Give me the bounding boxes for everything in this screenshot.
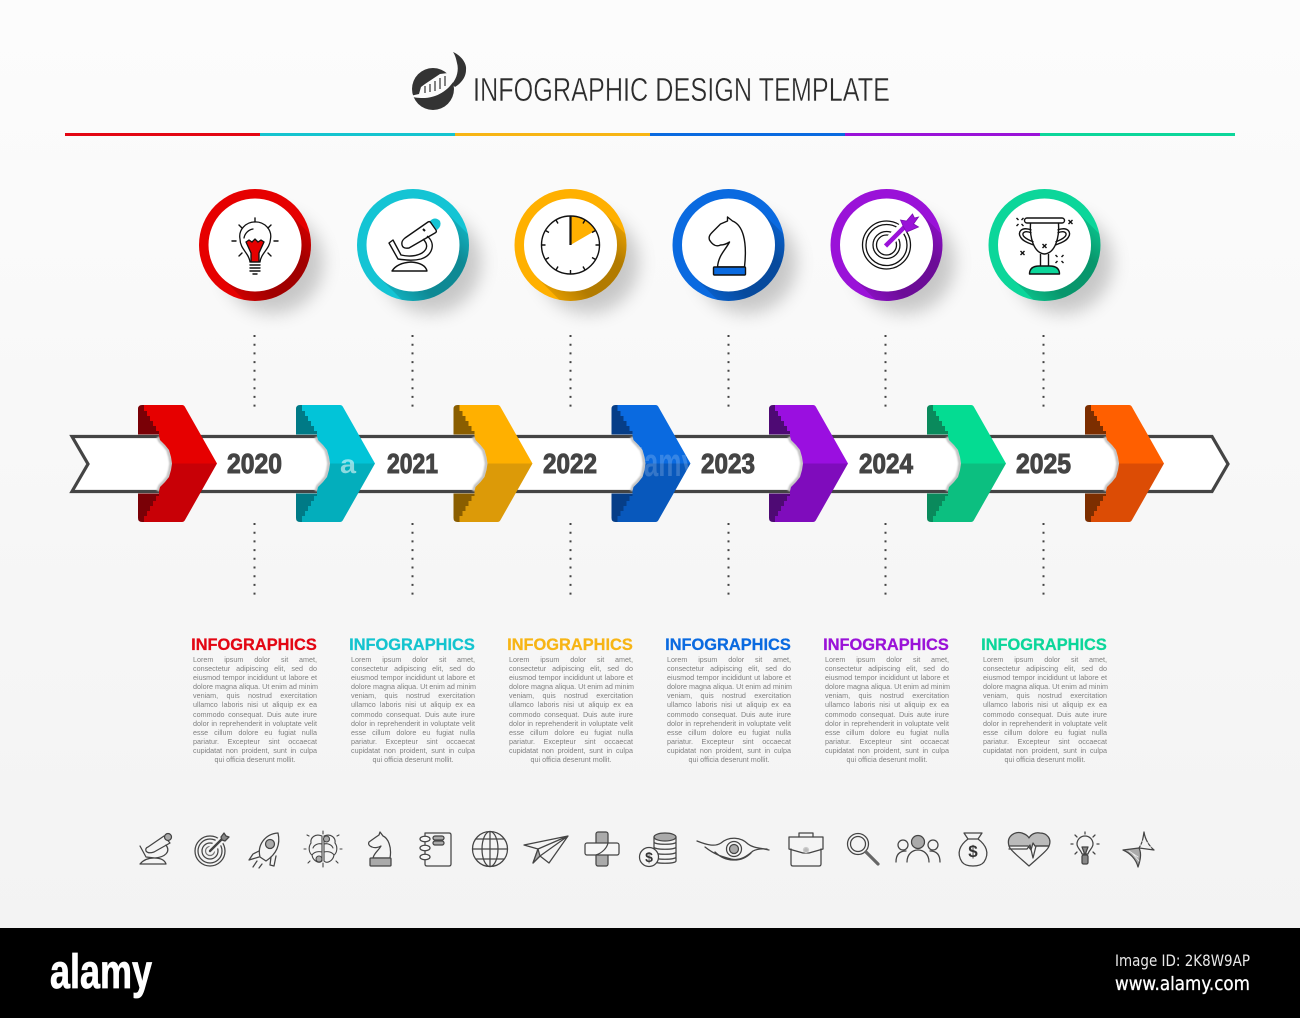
icon: microscope bbox=[140, 834, 172, 864]
text block 2023: qui officia deserunt mollit. bbox=[689, 755, 769, 764]
text block 2020: Lorem ipsum dolor sit amet, bbox=[193, 655, 317, 664]
text block 2022: INFOGRAPHICS bbox=[507, 636, 633, 654]
dotted connectors below ribbon bbox=[254, 523, 1044, 597]
text block 2025: ullamco laboris nisi ut aliquip ex ea bbox=[983, 700, 1107, 709]
text block 2020 bbox=[191, 636, 318, 764]
text block 2022: veniam, quis nostrud exercitation bbox=[509, 691, 633, 700]
icon: target bbox=[195, 833, 229, 866]
text block 2025: veniam, quis nostrud exercitation bbox=[983, 691, 1107, 700]
chevron 7 orange bbox=[1085, 405, 1164, 522]
chevron 5 purple bbox=[769, 405, 848, 522]
text block 2021: pariatur. Excepteur sint occaecat bbox=[351, 737, 475, 746]
text block 2022: ullamco laboris nisi ut aliquip ex ea bbox=[509, 700, 633, 709]
icon: rocket bbox=[249, 833, 279, 868]
icon: trophy bbox=[1016, 218, 1072, 274]
text block 2024: INFOGRAPHICS bbox=[823, 636, 949, 654]
text block 2022: qui officia deserunt mollit. bbox=[531, 755, 611, 764]
icon: knight bbox=[369, 832, 391, 866]
footer url: www.alamy.com bbox=[1115, 973, 1250, 995]
text block 2021: veniam, quis nostrud exercitation bbox=[351, 691, 475, 700]
icon: medical cross bbox=[585, 832, 619, 866]
text block 2022: dolor in reprehenderit in voluptate velit bbox=[509, 719, 633, 728]
text block 2023: dolor in reprehenderit in voluptate velit bbox=[667, 719, 791, 728]
icon: briefcase bbox=[789, 833, 823, 866]
logo bbox=[410, 52, 466, 110]
footer band bbox=[0, 928, 1300, 1018]
text block 2024: esse cillum dolore eu fugiat nulla bbox=[825, 728, 949, 737]
text block 2020: dolor in reprehenderit in voluptate velit bbox=[193, 719, 317, 728]
title: INFOGRAPHIC DESIGN TEMPLATE bbox=[473, 71, 890, 108]
text block 2024: ullamco laboris nisi ut aliquip ex ea bbox=[825, 700, 949, 709]
watermark on blue chevron: alamy bbox=[622, 441, 696, 485]
text block 2025: Lorem ipsum dolor sit amet, bbox=[983, 655, 1107, 664]
icon: notebook bbox=[420, 833, 451, 866]
year labels: 2024 bbox=[859, 448, 913, 479]
watermark letter on teal chevron: a bbox=[340, 449, 357, 479]
icon: money bag bbox=[959, 833, 987, 866]
text block 2021: dolor in reprehenderit in voluptate velit bbox=[351, 719, 475, 728]
chevron 1 red bbox=[138, 405, 217, 522]
text block 2022: commodo consequat. Duis aute irure bbox=[509, 710, 633, 719]
text block 2023 bbox=[665, 636, 792, 764]
icon: heart with pulse bbox=[1008, 833, 1050, 866]
year labels: 2025 bbox=[1016, 448, 1071, 479]
text block 2025: consectetur adipiscing elit, sed do bbox=[983, 664, 1107, 673]
text block 2024: commodo consequat. Duis aute irure bbox=[825, 710, 949, 719]
text block 2023: veniam, quis nostrud exercitation bbox=[667, 691, 791, 700]
text block 2020: commodo consequat. Duis aute irure bbox=[193, 710, 317, 719]
text block 2024: dolor in reprehenderit in voluptate velit bbox=[825, 719, 949, 728]
footer image id: Image ID: 2K8W9AP bbox=[1115, 951, 1250, 970]
text block 2025: qui officia deserunt mollit. bbox=[1005, 755, 1085, 764]
text block 2020: consectetur adipiscing elit, sed do bbox=[193, 664, 317, 673]
text block 2022: consectetur adipiscing elit, sed do bbox=[509, 664, 633, 673]
text block 2025: dolor in reprehenderit in voluptate velit bbox=[983, 719, 1107, 728]
text block 2025: pariatur. Excepteur sint occaecat bbox=[983, 737, 1107, 746]
text block 2025: cupidatat non proident, sunt in culpa bbox=[983, 746, 1107, 755]
bottom icon row bbox=[140, 831, 1154, 868]
icon: microscope bbox=[389, 218, 441, 271]
circle: target bbox=[830, 189, 962, 320]
text block 2021: eiusmod tempor incididunt ut labore et bbox=[351, 673, 475, 682]
text block 2022: dolore magna aliqua. Ut enim ad minim bbox=[509, 682, 634, 691]
text block 2025: INFOGRAPHICS bbox=[981, 636, 1107, 654]
text block 2022: eiusmod tempor incididunt ut labore et bbox=[509, 673, 633, 682]
chevron 4 blue bbox=[612, 405, 690, 522]
text block 2025: esse cillum dolore eu fugiat nulla bbox=[983, 728, 1107, 737]
text block 2025 bbox=[981, 636, 1108, 764]
text block 2022: pariatur. Excepteur sint occaecat bbox=[509, 737, 633, 746]
text block 2020: dolore magna aliqua. Ut enim ad minim bbox=[193, 682, 318, 691]
text block 2020: ullamco laboris nisi ut aliquip ex ea bbox=[193, 700, 317, 709]
chevron 6 green bbox=[927, 405, 1006, 522]
icon: magnifier bbox=[848, 834, 878, 864]
text block 2024: eiusmod tempor incididunt ut labore et bbox=[825, 673, 949, 682]
text block 2023: ullamco laboris nisi ut aliquip ex ea bbox=[667, 700, 791, 709]
icon: people bbox=[896, 836, 940, 862]
year labels bbox=[227, 448, 1071, 479]
text block 2021 bbox=[349, 636, 476, 764]
chevron 3 yellow bbox=[454, 405, 532, 522]
icon: lightbulb bbox=[232, 218, 278, 274]
header colour rule bbox=[65, 133, 1235, 136]
circle: chess knight bbox=[672, 189, 804, 320]
text block 2020: INFOGRAPHICS bbox=[191, 636, 317, 654]
icon: clock bbox=[542, 216, 600, 274]
text block 2021: cupidatat non proident, sunt in culpa bbox=[351, 746, 475, 755]
text block 2024 bbox=[823, 636, 950, 764]
text block 2021: Lorem ipsum dolor sit amet, bbox=[351, 655, 475, 664]
text block 2024: cupidatat non proident, sunt in culpa bbox=[825, 746, 949, 755]
text block 2021: consectetur adipiscing elit, sed do bbox=[351, 664, 475, 673]
text block 2023: consectetur adipiscing elit, sed do bbox=[667, 664, 791, 673]
text block 2025: commodo consequat. Duis aute irure bbox=[983, 710, 1107, 719]
icon: eye bbox=[697, 838, 769, 860]
year labels: 2021 bbox=[387, 448, 438, 479]
icon: knight bbox=[709, 217, 746, 275]
text block 2025: eiusmod tempor incididunt ut labore et bbox=[983, 673, 1107, 682]
text block 2020: esse cillum dolore eu fugiat nulla bbox=[193, 728, 317, 737]
footer logo: alamy bbox=[50, 946, 152, 999]
text block 2020: qui officia deserunt mollit. bbox=[215, 755, 295, 764]
text block 2023: cupidatat non proident, sunt in culpa bbox=[667, 746, 791, 755]
icon: brain bbox=[304, 831, 342, 867]
text block 2023: pariatur. Excepteur sint occaecat bbox=[667, 737, 791, 746]
text block 2024: dolore magna aliqua. Ut enim ad minim bbox=[825, 682, 950, 691]
text block 2022: cupidatat non proident, sunt in culpa bbox=[509, 746, 633, 755]
text block 2020: cupidatat non proident, sunt in culpa bbox=[193, 746, 317, 755]
icon: lightbulb bbox=[1071, 832, 1099, 864]
text block 2021: ullamco laboris nisi ut aliquip ex ea bbox=[351, 700, 475, 709]
circle: microscope bbox=[357, 189, 488, 320]
text block 2022: esse cillum dolore eu fugiat nulla bbox=[509, 728, 633, 737]
year labels: 2023 bbox=[701, 448, 755, 479]
icon: money bag: $ bbox=[968, 842, 978, 861]
text block 2023: esse cillum dolore eu fugiat nulla bbox=[667, 728, 791, 737]
ribbon timeline arrow bbox=[72, 436, 1228, 492]
icon: DNA bbox=[1123, 832, 1154, 867]
icon: coins: $ bbox=[645, 849, 653, 865]
text block 2021: dolore magna aliqua. Ut enim ad minim bbox=[351, 682, 476, 691]
text block 2022 bbox=[507, 636, 634, 764]
text block 2023: INFOGRAPHICS bbox=[665, 636, 791, 654]
text block 2023: commodo consequat. Duis aute irure bbox=[667, 710, 791, 719]
icon: paper plane bbox=[524, 836, 568, 863]
text block 2024: qui officia deserunt mollit. bbox=[847, 755, 927, 764]
text block 2024: veniam, quis nostrud exercitation bbox=[825, 691, 949, 700]
text block 2025: dolore magna aliqua. Ut enim ad minim bbox=[983, 682, 1108, 691]
circle: clock bbox=[514, 189, 646, 320]
text block 2020: eiusmod tempor incididunt ut labore et bbox=[193, 673, 317, 682]
text block 2021: INFOGRAPHICS bbox=[349, 636, 475, 654]
circle: lightbulb bbox=[199, 189, 330, 320]
text block 2023: eiusmod tempor incididunt ut labore et bbox=[667, 673, 791, 682]
icon: globe bbox=[472, 832, 508, 866]
icon: coins bbox=[640, 833, 676, 866]
text block 2020: pariatur. Excepteur sint occaecat bbox=[193, 737, 317, 746]
dotted connectors above ribbon bbox=[254, 335, 1044, 407]
text block 2023: dolore magna aliqua. Ut enim ad minim bbox=[667, 682, 792, 691]
text block 2023: Lorem ipsum dolor sit amet, bbox=[667, 655, 791, 664]
text block 2024: Lorem ipsum dolor sit amet, bbox=[825, 655, 949, 664]
text block 2024: pariatur. Excepteur sint occaecat bbox=[825, 737, 949, 746]
chevron 2 teal bbox=[296, 405, 375, 522]
text block 2021: commodo consequat. Duis aute irure bbox=[351, 710, 475, 719]
icon: target with arrow bbox=[862, 214, 918, 269]
text block 2022: Lorem ipsum dolor sit amet, bbox=[509, 655, 633, 664]
text block 2024: consectetur adipiscing elit, sed do bbox=[825, 664, 949, 673]
text block 2021: qui officia deserunt mollit. bbox=[373, 755, 453, 764]
text block 2020: veniam, quis nostrud exercitation bbox=[193, 691, 317, 700]
text block 2021: esse cillum dolore eu fugiat nulla bbox=[351, 728, 475, 737]
year labels: 2020 bbox=[227, 448, 282, 479]
circle: trophy bbox=[988, 189, 1120, 320]
year labels: 2022 bbox=[543, 448, 597, 479]
